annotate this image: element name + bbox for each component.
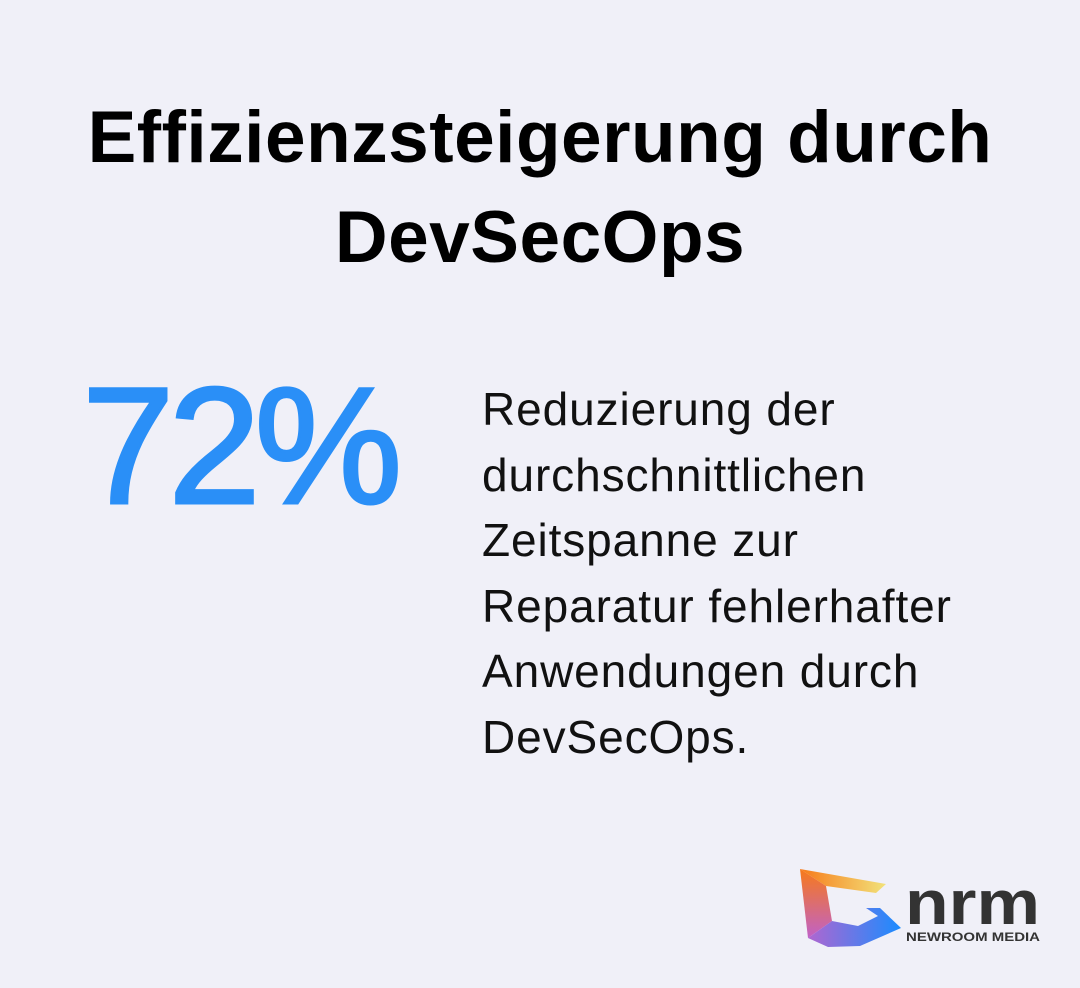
description text: durchschnittlichen: [482, 448, 866, 500]
title: [88, 97, 992, 278]
logo: [800, 869, 1040, 947]
logo: nrm: [905, 869, 1040, 938]
description text: Reduzierung der: [482, 383, 836, 435]
logo: NEWROOM MEDIA: [906, 930, 1040, 944]
description text: Zeitspanne zur: [482, 514, 799, 566]
description text: DevSecOps.: [482, 710, 749, 762]
title: Effizienzsteigerung durch: [88, 97, 992, 178]
description text: [482, 383, 952, 762]
description text: Anwendungen durch: [482, 645, 919, 697]
description text: Reparatur fehlerhafter: [482, 580, 952, 632]
title: DevSecOps: [335, 197, 745, 278]
big number: 72%: [82, 354, 396, 539]
